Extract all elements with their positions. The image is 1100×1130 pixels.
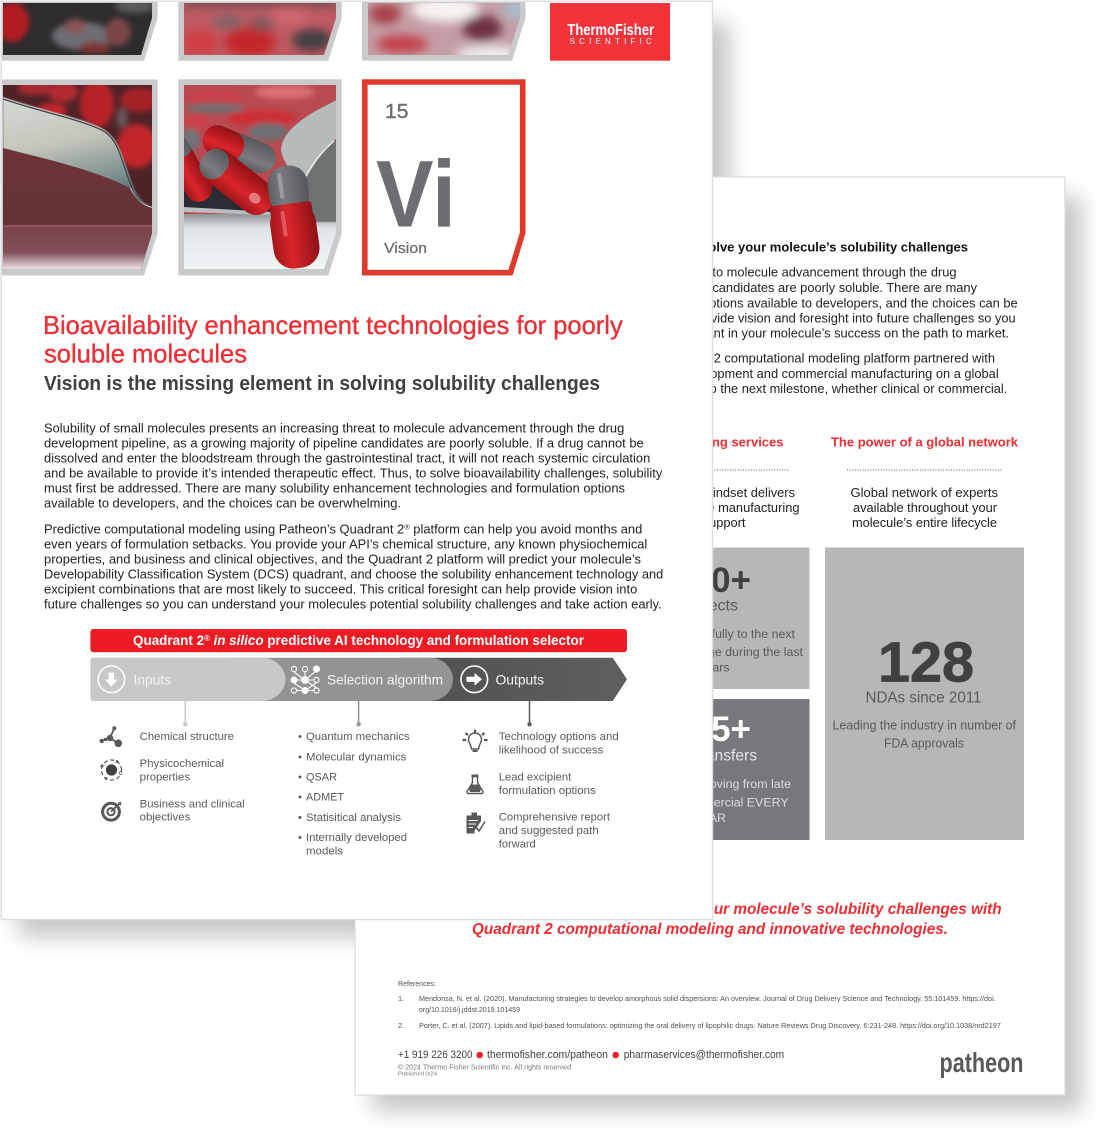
- back page intro text: provide vision and foresight into future challenges so you: [692, 310, 1016, 326]
- stat card: transfers: moving from late: [699, 777, 791, 791]
- icon: chemical structure: [100, 726, 122, 747]
- photo tile: spoon and capsules: [2, 80, 160, 276]
- copyright: Published 0/24: [398, 1072, 437, 1078]
- icon: light bulb: [462, 730, 488, 751]
- label: comprehensive report: Comprehensive report: [499, 812, 610, 824]
- label: business and clinical objectives: objectives: [140, 812, 191, 824]
- icon: target: [103, 802, 122, 820]
- photo tile top row 1: [0, 0, 158, 61]
- back page intro text: important in your molecule’s success on the path to market.: [671, 326, 1009, 340]
- back page intro text: 2 computational modeling platform partnered with: [714, 351, 995, 366]
- copyright: © 2024 Thermo Fisher Scientific Inc. All rights reserved.: [398, 1063, 573, 1071]
- selection algorithm list: •: [298, 812, 302, 824]
- title: Bioavailability enhancement technologies for poorly: [43, 310, 623, 340]
- capsule middle: [199, 148, 272, 215]
- stat card: transfers: 5+: [711, 710, 751, 749]
- connector: selection: [356, 701, 361, 726]
- back page intro text: [671, 265, 1018, 396]
- stat card: transfers: commercial EVERY: [680, 796, 789, 810]
- body paragraph 2: excipient combinations that are most likely to succeed. This critical foresight can help provide vision into: [44, 581, 637, 596]
- column text: services: mindset delivers: [702, 485, 795, 500]
- column text: global network: Global network of experts: [850, 485, 998, 500]
- capsule front: [268, 166, 320, 269]
- selection algorithm list: Quantum mechanics: [306, 731, 410, 743]
- label: business and clinical objectives: [140, 798, 245, 824]
- selection algorithm list: •: [298, 731, 302, 743]
- column heading: global network: The power of a global network: [831, 435, 1019, 450]
- body paragraph 2: platform can help you avoid months and: [410, 521, 642, 536]
- icon: outputs right arrow: [461, 666, 488, 693]
- selection algorithm list: Internally developed: [306, 832, 407, 844]
- stat card: projects: stage during the last: [691, 645, 804, 659]
- label: lead excipient: [499, 772, 596, 797]
- Thermo Fisher logo: ThermoFisher: [567, 22, 654, 39]
- Thermo Fisher logo: SCIENTIFIC: [570, 37, 652, 46]
- icon: physicochemical: [100, 760, 122, 780]
- body paragraph 2: ®: [404, 522, 410, 531]
- label: chemical structure: Chemical structure: [140, 731, 234, 743]
- panel: back page: [355, 177, 1065, 1095]
- stat card: transfers: [560, 699, 810, 840]
- front page drop shadow: [18, 22, 730, 937]
- copyright: [398, 1063, 573, 1078]
- references: References:: [398, 979, 436, 988]
- body paragraph 1: available to developers, and the choices can be overwhelming.: [44, 496, 401, 511]
- back page intro text: development and commercial manufacturing on a global: [680, 366, 999, 381]
- column text: global network: [850, 485, 998, 530]
- subtitle: Vision is the missing element in solving solubility challenges: [44, 373, 600, 395]
- body paragraph 2: [44, 521, 663, 611]
- stat card: projects: [560, 548, 810, 689]
- closing statement: [472, 901, 1002, 938]
- selection algorithm list: •: [298, 792, 302, 804]
- back page intro text: candidates are poorly soluble. There are many: [712, 280, 978, 295]
- inputs column: [100, 726, 245, 824]
- stat card: projects: 0+: [711, 561, 751, 600]
- label: technology options: Technology options and: [499, 731, 619, 743]
- references: [398, 979, 1001, 1030]
- stat card: 128 NDAs: NDAs since 2011: [866, 690, 982, 707]
- body paragraph 1: and be available to provide it’s intended therapeutic effect. Thus, to solve bioavailability challenges, solubility: [44, 466, 663, 481]
- label: physicochemical properties: Physicochemical: [140, 758, 224, 770]
- selection algorithm list: Molecular dynamics: [306, 751, 407, 763]
- selection algorithm list: QSAR: [306, 772, 337, 784]
- back page intro text: options available to developers, and the choices can be: [702, 295, 1018, 310]
- diagram heading bar: predictive AI technology and formulation selector: [267, 632, 597, 648]
- contact line: pharmaservices@thermofisher.com: [624, 1049, 784, 1061]
- body paragraph 1: Solubility of small molecules presents an increasing threat to molecule advancement through the drug: [44, 421, 624, 436]
- process arrow: [90, 658, 627, 701]
- stat card: transfers: transfers: [696, 748, 757, 765]
- closing statement: Quadrant 2 computational modeling and innovative technologies.: [472, 921, 948, 938]
- body paragraph 2: future challenges so you can understand your molecules potential solubility challenges and take action early.: [44, 596, 662, 611]
- label: physicochemical properties: [140, 758, 224, 784]
- column heading: services: manufacturing services: [638, 435, 784, 450]
- label: lead excipient: Lead excipient: [499, 772, 571, 784]
- icon: selection network: [291, 666, 319, 693]
- stat card: projects: years: [699, 661, 730, 675]
- photo tile top row 2: [178, 0, 342, 61]
- contact line: thermofisher.com/patheon: [487, 1049, 608, 1061]
- closing statement: your molecule’s solubility challenges with: [695, 901, 1002, 918]
- diagram heading bar: Quadrant 2: [133, 632, 207, 648]
- stat card: 128 NDAs: Leading the industry in number of: [832, 718, 1016, 732]
- stat card: 128 NDAs: [825, 548, 1024, 840]
- back page heading: solve your molecule’s solubility challenges: [701, 239, 968, 254]
- selection algorithm list: •: [298, 772, 302, 784]
- contact line: [398, 1049, 784, 1061]
- label: physicochemical properties: properties: [140, 772, 191, 784]
- photo tile: capsule close-up: [161, 79, 342, 276]
- label: selection algorithm: Selection algorithm: [327, 672, 443, 688]
- body paragraph 2: properties, and business and clinical objectives, and the Quadrant 2 platform will predict your molecule’s: [44, 551, 641, 566]
- label: comprehensive report: [499, 812, 610, 850]
- icon: flask: [467, 774, 483, 794]
- stat card: transfers: YEAR: [692, 811, 726, 825]
- label: comprehensive report: and suggested path: [499, 825, 599, 837]
- selection algorithm list: Statisitical analysis: [306, 812, 401, 824]
- references: 1.: [398, 994, 404, 1003]
- body paragraph 1: dissolved and enter the bloodstream through the gastrointestinal tract, it will not reach systemic circulation: [44, 451, 650, 466]
- label: lead excipient: formulation options: [499, 785, 596, 797]
- column text: global network: molecule’s entire lifecycle: [852, 515, 997, 530]
- selection algorithm list: •: [298, 832, 302, 844]
- connector: inputs: [183, 701, 188, 726]
- capsule left: [184, 138, 212, 202]
- label: business and clinical objectives: Business and clinical: [140, 798, 245, 810]
- references: org/10.1016/j.jddst.2019.101459: [419, 1005, 520, 1014]
- element card: Vision: Vi: [376, 142, 456, 248]
- diagram heading bar: ®: [204, 634, 210, 643]
- connector: outputs: [527, 701, 532, 726]
- column text: global network: available throughout your: [853, 500, 998, 515]
- title: [43, 310, 623, 368]
- contact line: +1 919 226 3200: [398, 1049, 472, 1061]
- body paragraph 1: development pipeline, as a growing majority of pipeline candidates are poorly soluble. If a drug cannot be: [44, 436, 644, 451]
- column text: services: [697, 485, 800, 530]
- photo tile top row 3: [362, 0, 527, 62]
- diagram heading bar: in silico: [210, 632, 264, 648]
- element card: Vision: 15: [385, 101, 408, 123]
- stat card: projects: projects: [682, 598, 738, 615]
- label: comprehensive report: forward: [499, 838, 536, 850]
- element card: Vision: [365, 82, 523, 273]
- back page drop shadow: [372, 196, 1082, 1111]
- column text: services: support: [703, 515, 746, 530]
- selection algorithm list: [298, 731, 410, 858]
- selection algorithm list: models: [306, 846, 344, 858]
- spoon: [281, 100, 337, 178]
- back page intro text: to the next milestone, whether clinical or commercial.: [706, 381, 1007, 396]
- stat card: 128 NDAs: FDA approvals: [884, 737, 964, 751]
- stat card: 128 NDAs: 128: [878, 631, 974, 695]
- Thermo Fisher logo: [550, 3, 670, 61]
- icon: inputs down arrow: [98, 666, 125, 693]
- label: technology options: [499, 731, 619, 756]
- references: Mendonsa, N. et al. (2020). Manufacturing strategies to develop amorphous solid dispersions: An overview. Journal of Drug Delivery Science and Technology. 55:101459. https://doi.: [419, 994, 996, 1003]
- body paragraph 2: Developability Classification System (DCS) quadrant, and choose the solubility enhancement technology and: [44, 566, 663, 581]
- capsule back: [202, 125, 276, 173]
- outputs column: [462, 730, 619, 850]
- references: Porter, C. et al. (2007). Lipids and lipid-based formulations: optimizing the oral delivery of lipophilic drugs. Nature Reviews Drug Discovery. 6:231-248. https://doi.org/10.1038/nrd2197: [419, 1021, 1001, 1030]
- column text: services: the manufacturing: [697, 500, 800, 515]
- patheon logo: patheon: [940, 1047, 1024, 1078]
- body paragraph 1: must first be addressed. There are many solubility enhancement technologies and formulation options: [44, 481, 625, 496]
- icon: clipboard report: [466, 812, 485, 834]
- selection algorithm list: ADMET: [306, 792, 344, 804]
- panel: front page: [0, 0, 712, 920]
- tray: [184, 184, 272, 212]
- label: technology options: likelihood of success: [499, 744, 604, 756]
- element card: Vision: Vision: [384, 240, 427, 257]
- diagram heading bar: [90, 629, 627, 652]
- back page intro text: to molecule advancement through the drug: [712, 265, 957, 280]
- body paragraph 2: even years of formulation setbacks. You provide your API’s chemical structure, any known physiochemical: [44, 536, 647, 551]
- body paragraph 2: Predictive computational modeling using Patheon’s Quadrant 2: [44, 521, 407, 536]
- references: 2.: [398, 1021, 404, 1030]
- selection algorithm list: •: [298, 751, 302, 763]
- label: outputs: Outputs: [496, 672, 544, 688]
- body paragraph 1: [44, 421, 663, 511]
- stat card: projects: successfully to the next: [667, 627, 796, 641]
- label: inputs: Inputs: [134, 672, 171, 688]
- title: soluble molecules: [44, 338, 247, 368]
